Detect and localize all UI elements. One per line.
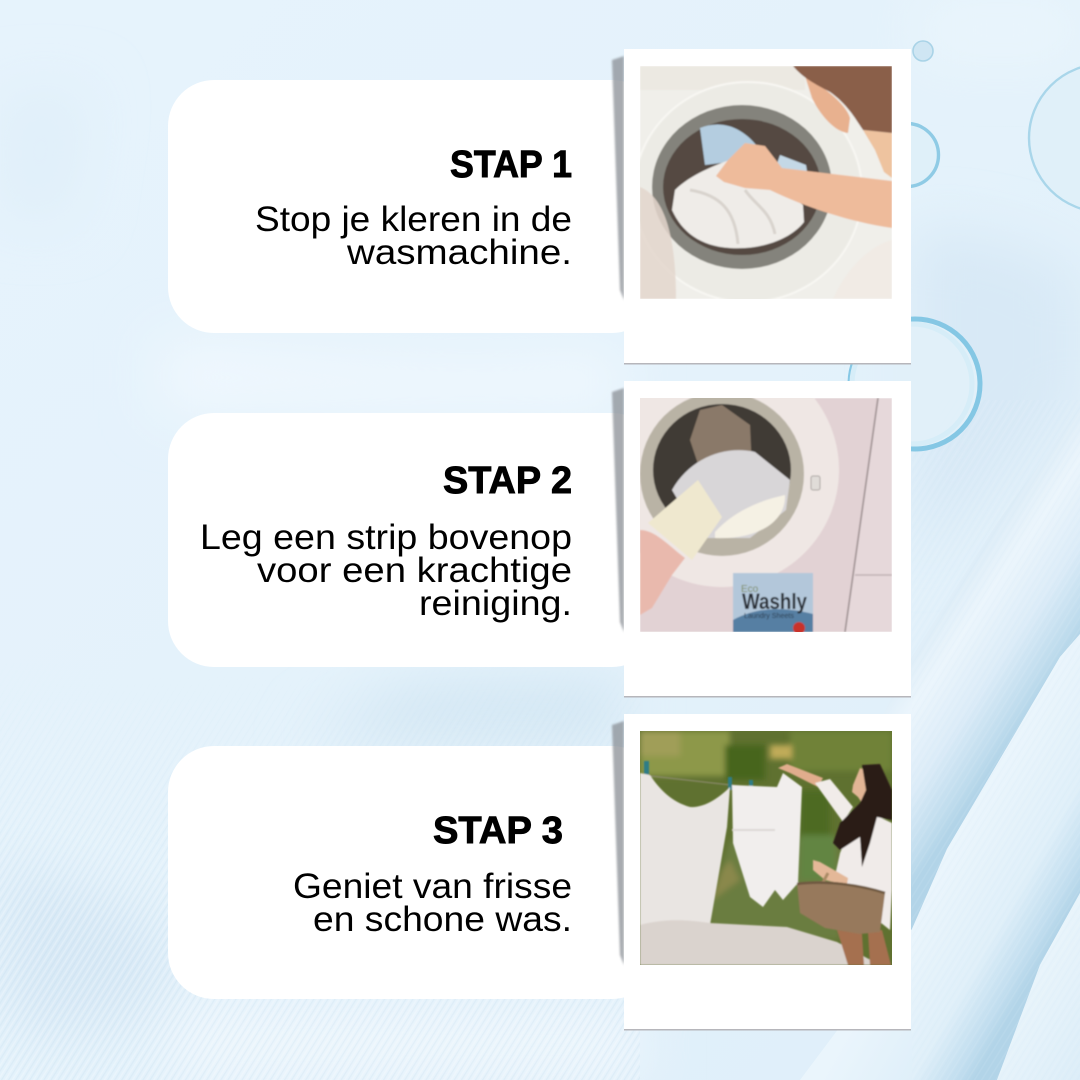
background: soft blue fabric bbox=[0, 246, 1080, 1080]
photo: hand loading towels into washing machine bbox=[634, 66, 892, 302]
bubble: large bbox=[850, 319, 980, 449]
heading: stap 2: STAP 2 bbox=[443, 460, 572, 502]
photo: laundry sheet and Eco Washly box at the machine: Eco bbox=[741, 584, 759, 595]
text: step 2 description: voor een krachtige bbox=[257, 551, 572, 590]
bubble: right edge bbox=[1029, 64, 1080, 212]
text: step 3 description bbox=[293, 867, 572, 939]
text: step 1 description: wasmachine. bbox=[346, 233, 572, 272]
photo: laundry sheet and Eco Washly box at the machine: Laundry Sheets bbox=[744, 613, 794, 620]
panel: step 1 text card bbox=[168, 80, 658, 333]
text: step 3 description: en schone was. bbox=[313, 900, 572, 939]
bubble: middle bbox=[876, 124, 938, 186]
bubble: small top bbox=[913, 41, 933, 61]
polaroid frame 3 bbox=[612, 714, 911, 1030]
text: step 1 description bbox=[255, 200, 572, 272]
panel: step 3 text card bbox=[168, 746, 658, 999]
heading: stap 1: STAP 1 bbox=[450, 144, 572, 186]
photo: laundry sheet and Eco Washly box at the machine bbox=[640, 398, 892, 632]
text: step 3 description: Geniet van frisse bbox=[293, 867, 572, 906]
text: step 1 description: Stop je kleren in de bbox=[255, 200, 572, 239]
text: step 2 description bbox=[200, 518, 572, 623]
polaroid frame 2 bbox=[605, 353, 911, 698]
panel: step 2 text card bbox=[168, 413, 658, 667]
photo: woman hanging white laundry on a line outdoors bbox=[640, 731, 892, 965]
text: step 2 description: Leg een strip bovenop bbox=[200, 518, 572, 557]
text: step 2 description: reiniging. bbox=[419, 584, 572, 623]
heading: stap 3: STAP 3 bbox=[433, 810, 563, 852]
photo: laundry sheet and Eco Washly box at the machine: Washly bbox=[742, 589, 808, 614]
polaroid frame 1 bbox=[612, 49, 911, 364]
